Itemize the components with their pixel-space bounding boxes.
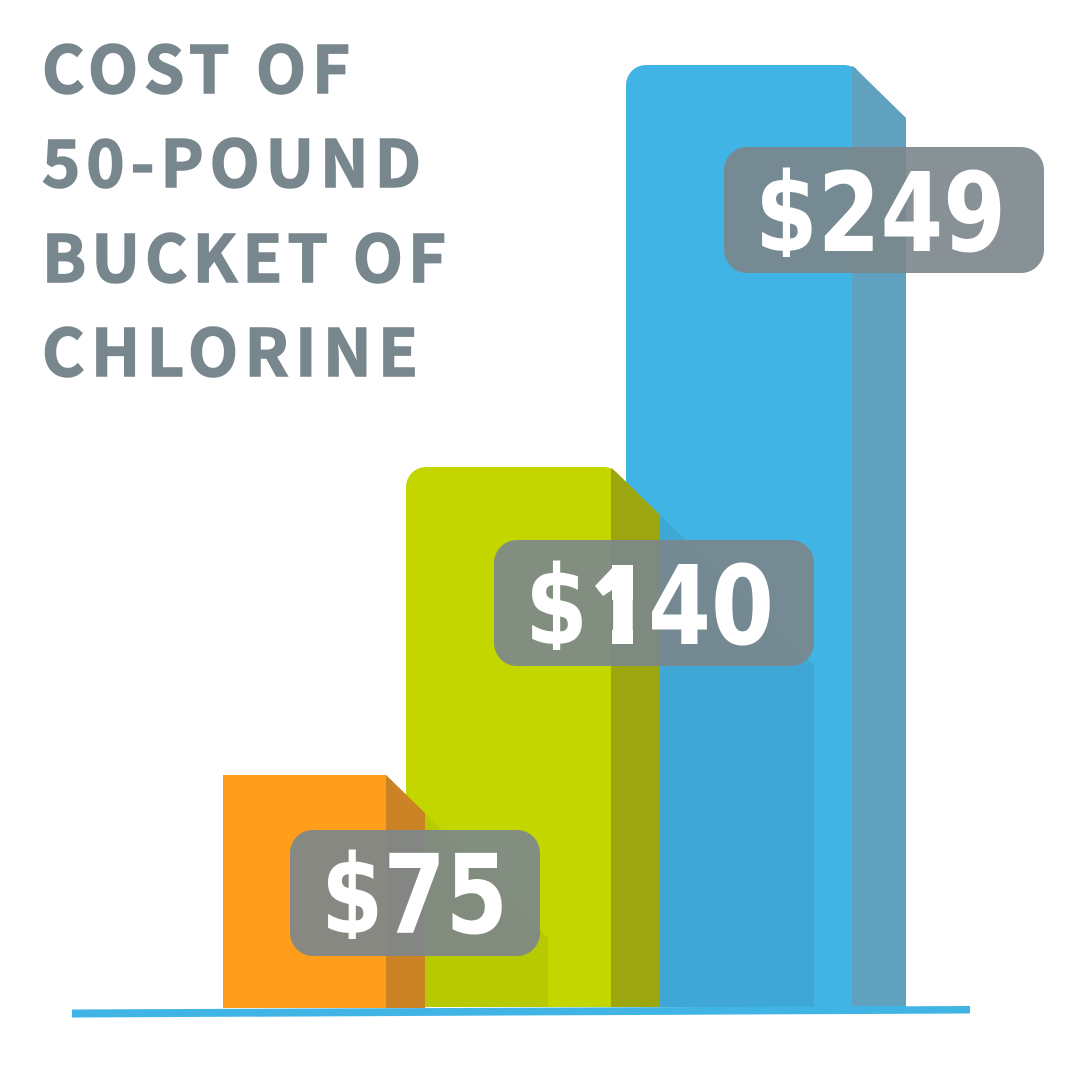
badge: $140: 1 — [582, 542, 659, 670]
title: COST OF — [42, 18, 350, 112]
title: BUCKET OF — [42, 207, 446, 301]
title — [42, 18, 446, 395]
badge: $249: $249 — [755, 149, 1006, 277]
badge: $140 — [494, 540, 814, 670]
badge: $140: $ — [525, 542, 588, 670]
bar: $75 orange — [223, 775, 548, 1008]
bar: $249 blue — [626, 65, 906, 1007]
badge: $75: $75 — [321, 831, 508, 959]
badge: $140: 40 — [648, 542, 774, 670]
title: CHLORINE — [42, 301, 418, 395]
title: 50-POUND — [42, 112, 421, 206]
bar: $140 green — [406, 467, 814, 1007]
baseline axis — [72, 1006, 970, 1018]
